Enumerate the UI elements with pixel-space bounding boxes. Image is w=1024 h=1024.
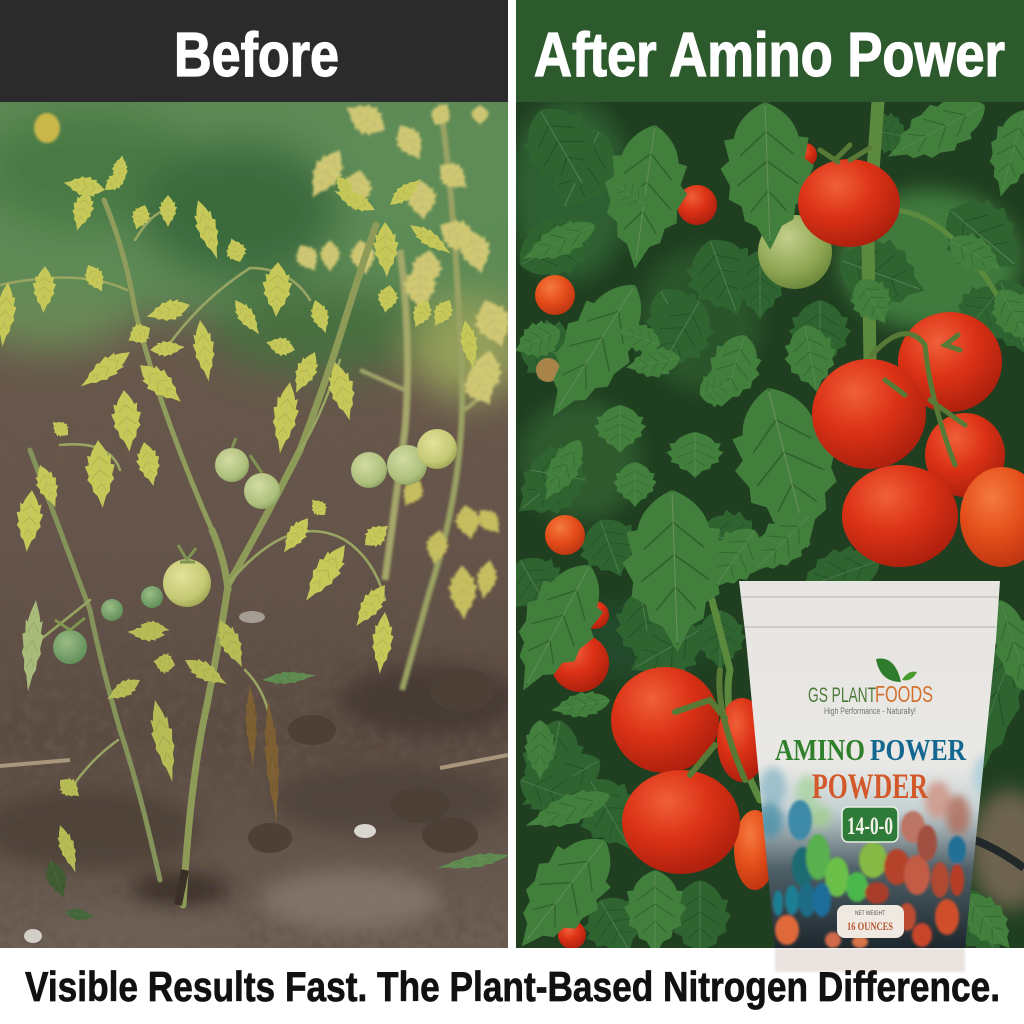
header: before — [0, 0, 508, 102]
front leaves — [490, 82, 1024, 969]
tomatoes: rear pale green cluster — [351, 429, 457, 488]
blurred green background foliage — [0, 102, 508, 420]
product name amino: AMINO — [775, 732, 865, 767]
amino acid spheres — [757, 755, 997, 948]
pebbles and straw — [0, 611, 508, 943]
soil texture — [250, 939, 506, 948]
stems and vines — [712, 102, 1000, 800]
drip line behind bag — [975, 840, 1024, 868]
green tomato — [758, 215, 832, 289]
heading: before: Before — [174, 21, 339, 90]
soil clods — [248, 668, 494, 853]
soil shading — [0, 665, 520, 948]
net weight label: NET WEIGHT — [855, 911, 885, 917]
header: after — [516, 0, 1024, 102]
lower tomato vines — [675, 670, 745, 780]
npk badge: 14-0-0 — [847, 813, 893, 840]
background small tomatoes — [535, 143, 817, 949]
tomatoes: lower left cluster — [611, 667, 776, 890]
dead brown leaves — [245, 686, 280, 824]
net weight label: 16 OUNCES — [847, 919, 893, 933]
tomatoes: ripe cluster upper right — [798, 159, 1024, 567]
tomatoes: front green fruit — [53, 438, 280, 664]
brand name foods: FOODS — [875, 681, 933, 707]
brand name: GS PLANT — [808, 684, 876, 707]
tomato calyx and vines — [820, 145, 965, 465]
small weed at soil — [40, 669, 511, 924]
net weight label — [837, 905, 904, 938]
panel: before photo — [0, 70, 560, 948]
blurred yellow fruit in background — [34, 113, 60, 143]
background foliage layer — [493, 92, 1024, 972]
yellowing leaves — [0, 154, 482, 675]
stem base — [178, 870, 185, 905]
lower leaves — [17, 599, 252, 875]
main plant stems — [0, 200, 385, 905]
background plants — [290, 94, 520, 690]
blurred deep foliage — [510, 100, 1024, 910]
tagline: High Performance - Naturally! — [824, 706, 916, 716]
product name powder: POWDER — [812, 766, 929, 806]
bag reflection — [775, 948, 965, 972]
product name power: POWER — [870, 732, 966, 767]
brand logo leaf — [876, 658, 917, 682]
npk badge — [842, 807, 898, 842]
product bag: amino power powder — [735, 580, 1005, 972]
bag seal creases — [740, 597, 1000, 627]
panel: after photo — [490, 82, 1024, 972]
